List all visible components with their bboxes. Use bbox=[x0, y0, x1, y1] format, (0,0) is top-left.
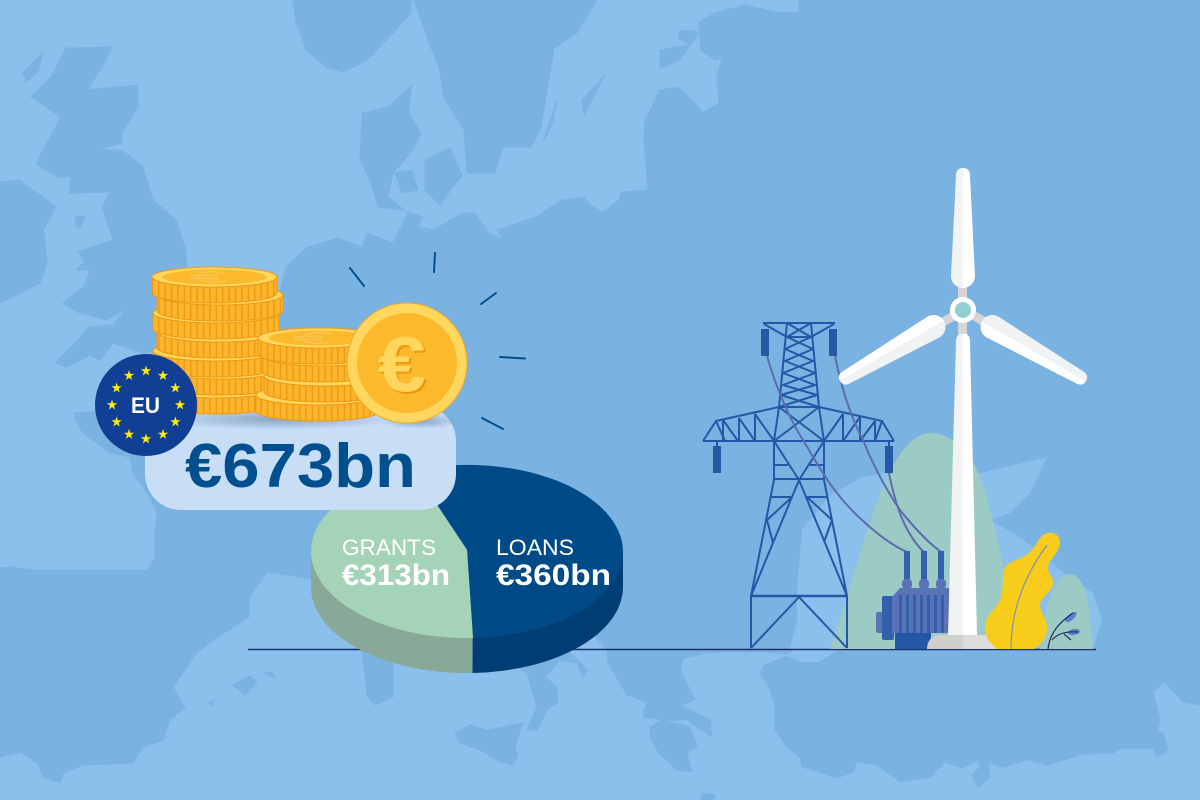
total amount panel bbox=[145, 405, 460, 510]
pylon body and legs bbox=[751, 441, 847, 648]
pylon insulators bbox=[713, 329, 893, 473]
small dark plant bbox=[1048, 610, 1080, 649]
turbine blade: top bbox=[951, 168, 975, 300]
pie slice: grants bbox=[311, 470, 473, 638]
right coin stack bbox=[256, 328, 386, 421]
transformer bushings bbox=[902, 551, 946, 589]
pie slice: loans bbox=[414, 465, 623, 638]
label: grants bbox=[342, 535, 450, 592]
transformer bbox=[876, 551, 950, 649]
EU badge bbox=[95, 354, 197, 456]
coin stacks bbox=[152, 267, 386, 421]
transformer cooling fins bbox=[899, 595, 944, 633]
euro symbol: € bbox=[378, 320, 426, 408]
label: grants: €313bn bbox=[342, 559, 450, 592]
wind turbine bbox=[834, 168, 1092, 649]
ring of stars bbox=[107, 366, 185, 443]
electricity pylon bbox=[703, 323, 894, 648]
power cables bbox=[767, 356, 941, 552]
green hills bbox=[830, 433, 1093, 649]
pie side: grants bbox=[311, 552, 473, 673]
large euro coin bbox=[347, 303, 467, 423]
Black Sea region drawn lighter bbox=[790, 457, 1102, 649]
label: loans: €360bn bbox=[496, 559, 611, 592]
label: loans: LOANS bbox=[496, 535, 574, 560]
turbine hub bbox=[950, 297, 976, 323]
left coin stack bbox=[152, 267, 283, 414]
EU text: EU bbox=[131, 393, 160, 418]
shine rays around coin bbox=[350, 253, 525, 429]
turbine base bbox=[927, 635, 963, 649]
euro symbol: € bbox=[380, 322, 428, 410]
ground line bbox=[248, 648, 1096, 650]
pie side: loans bbox=[472, 552, 623, 673]
pylon cross arm truss bbox=[703, 407, 894, 441]
yellow leaf plant bbox=[985, 533, 1060, 649]
pylon upper tower bbox=[763, 323, 835, 407]
total amount value: €673bn bbox=[185, 432, 416, 501]
turbine tower neck bbox=[958, 322, 967, 334]
label: loans bbox=[496, 535, 611, 592]
pie chart: grants and loans bbox=[311, 465, 623, 673]
turbine blade: left bbox=[834, 305, 960, 391]
turbine tower bbox=[948, 333, 963, 635]
label: grants: GRANTS bbox=[342, 535, 436, 560]
turbine blade: right bbox=[966, 305, 1092, 391]
